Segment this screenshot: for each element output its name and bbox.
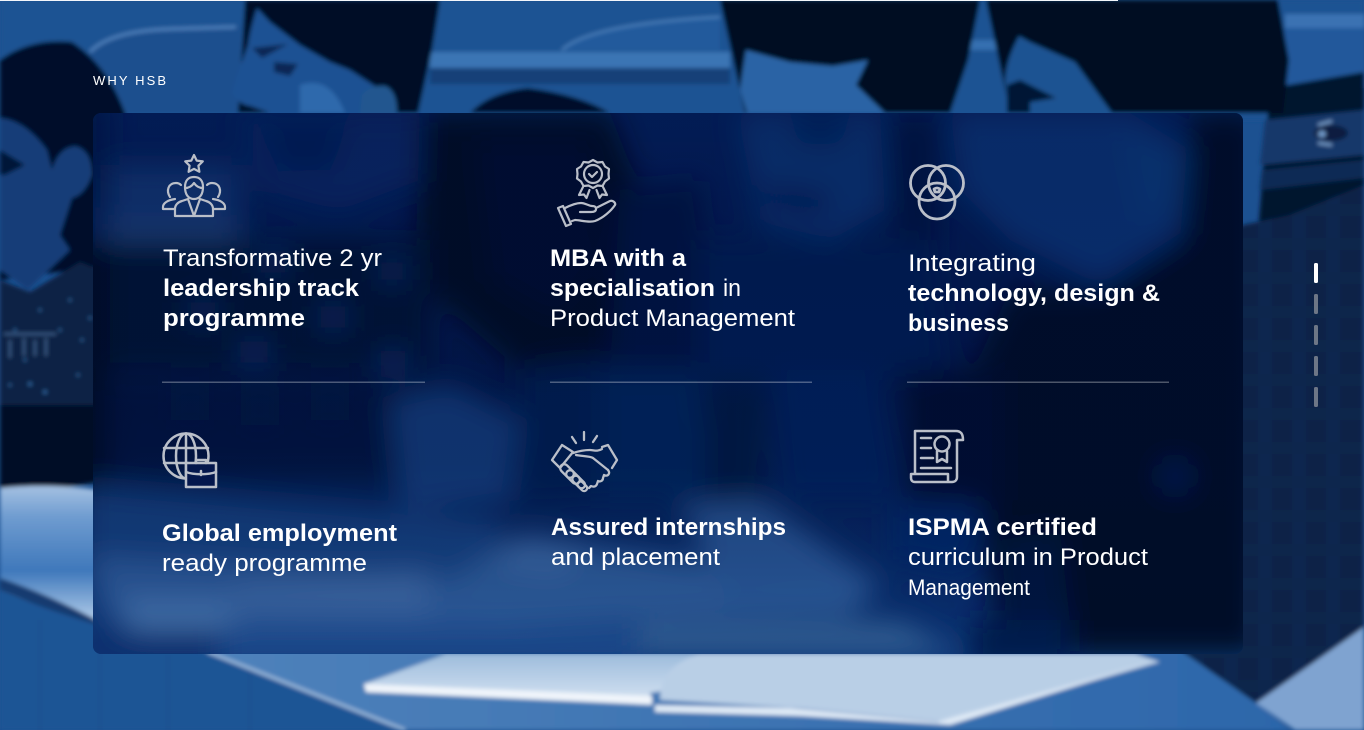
text: assured internships: Assured internships [551, 514, 786, 541]
text: integrating technology [908, 250, 1160, 337]
icon: globe with briefcase [164, 434, 216, 487]
text: transformative leadership: Transformative 2 yr [163, 245, 382, 272]
plaid shirt dark checks [110, 240, 430, 370]
desk surface left and front [0, 486, 100, 640]
icon: handshake [552, 432, 617, 492]
feature: technology design business [908, 166, 1160, 337]
right sleeve [1256, 627, 1364, 730]
text: MBA with specialisation [550, 245, 795, 332]
back wall and chairs [0, 0, 1364, 120]
pagination indicator [1314, 263, 1318, 407]
text: ISPMA certified: ISPMA certified [908, 514, 1097, 541]
student 4 at right top [986, 0, 1289, 113]
text: global employment: Global employment [162, 520, 397, 547]
feature: leadership track [163, 155, 382, 332]
feature: global employment [162, 434, 397, 577]
left student [0, 41, 132, 280]
text: MBA with specialisation: Product Management [550, 305, 795, 332]
text: integrating technology: Integrating [908, 250, 1036, 277]
desk bottom-left [85, 485, 500, 620]
open notebook [364, 654, 880, 705]
bag on right [1255, 72, 1364, 270]
icon: rosette on open hand [558, 160, 615, 226]
student 2 in profile [238, 0, 440, 113]
text: global employment [162, 520, 397, 577]
top-left chair and face [105, 165, 240, 225]
hand and paper blotches mid [390, 385, 520, 510]
panel: translucent features card [60, 100, 1260, 670]
text: global employment: ready programme [162, 550, 367, 577]
middle student hair [470, 88, 610, 113]
text: integrating technology: business [908, 310, 1009, 337]
icon: team with star [163, 155, 225, 216]
student 3 in centre top [720, 0, 980, 113]
text: transformative leadership [163, 245, 382, 332]
text: MBA with specialisation: MBA with a [550, 245, 686, 272]
row dividers [162, 382, 1169, 383]
eyebrow label: WHY HSB: WHY HSB [93, 73, 166, 88]
text: transformative leadership: programme [163, 305, 305, 332]
text: ISPMA certified [908, 514, 1148, 600]
feature: MBA specialisation [550, 160, 795, 332]
girl's dark hair [415, 113, 640, 370]
blurred books [230, 570, 430, 612]
text: ISPMA certified: curriculum in Product [908, 544, 1148, 571]
front desk surface [200, 650, 1290, 730]
student 3 blurred face [737, 113, 885, 240]
text: MBA with specialisation: in [723, 275, 741, 302]
text: integrating technology: technology, design & [908, 280, 1160, 307]
text: ISPMA certified: Management [908, 575, 1031, 600]
text: assured internships: and placement [551, 544, 720, 571]
icon: three overlapping circles [910, 166, 964, 219]
text: MBA with specialisation: specialisation [550, 275, 715, 302]
student 4 blurred face [950, 113, 1190, 285]
icon: certificate scroll [911, 431, 963, 482]
dark right side [960, 113, 1260, 654]
text: assured internships [551, 514, 786, 571]
right student plaid shirt [1100, 185, 1364, 703]
feature: ISPMA certified [908, 431, 1148, 600]
top hairline [0, 0, 1118, 1]
text: transformative leadership: leadership track [163, 275, 359, 302]
feature: assured internships [551, 432, 786, 571]
